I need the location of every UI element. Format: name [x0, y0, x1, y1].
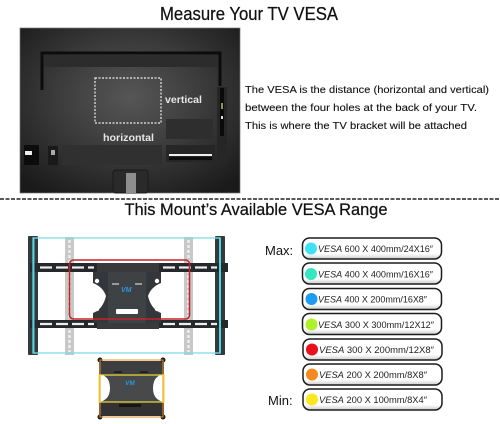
- pill: 400 x 400: [302, 263, 442, 284]
- pill: 200 x 200: [303, 364, 442, 385]
- pill: 300 x 200: [303, 339, 442, 360]
- pill: 300 x 300: VESA 300 X 300mm/12X12″: [318, 320, 435, 330]
- VESA explanation text: between the four holes at the back of your TV.: [245, 103, 477, 114]
- large mount diagram: [28, 236, 228, 355]
- label: max: Max:: [265, 243, 293, 258]
- label: horizontal: horizontal: [103, 132, 154, 144]
- label: vertical: vertical: [165, 94, 202, 106]
- VESA size list: [302, 238, 442, 410]
- TV back photo: [20, 28, 240, 193]
- pill: 200 x 100: VESA 200 X 100mm/8X4″: [319, 395, 428, 405]
- VESA explanation text: [245, 85, 489, 132]
- small mount diagram: VM: [125, 380, 135, 387]
- small mount diagram: [98, 358, 166, 420]
- title: available VESA range: This Mount’s Available VESA Range: [124, 200, 388, 219]
- pill: 400 x 400: VESA 400 X 400mm/16X16″: [318, 270, 434, 280]
- pill: 600 x 400: VESA 600 X 400mm/24X16″: [318, 244, 434, 254]
- title: measure your TV VESA: Measure Your TV VESA: [160, 4, 338, 24]
- pill: 400 x 200: [302, 288, 442, 310]
- VESA hole rectangle: [95, 78, 161, 123]
- wall plate: [93, 272, 161, 323]
- VESA explanation text: The VESA is the distance (horizontal and vertical): [245, 85, 489, 96]
- pill: 200 x 100: [303, 389, 442, 410]
- pill: 200 x 200: VESA 200 X 200mm/8X8″: [319, 370, 428, 380]
- VESA explanation text: This is where the TV bracket will be attached: [245, 121, 467, 132]
- label: min: Min:: [268, 393, 293, 408]
- pill: 300 x 200: VESA 300 X 200mm/12X8″: [319, 345, 435, 355]
- large mount diagram: VM: [121, 287, 132, 294]
- pill: 400 x 200: VESA 400 X 200mm/16X8″: [318, 294, 428, 304]
- dashed divider: [0, 198, 500, 200]
- pill: 600 x 400: [302, 238, 442, 259]
- pill: 300 x 300: [302, 314, 442, 334]
